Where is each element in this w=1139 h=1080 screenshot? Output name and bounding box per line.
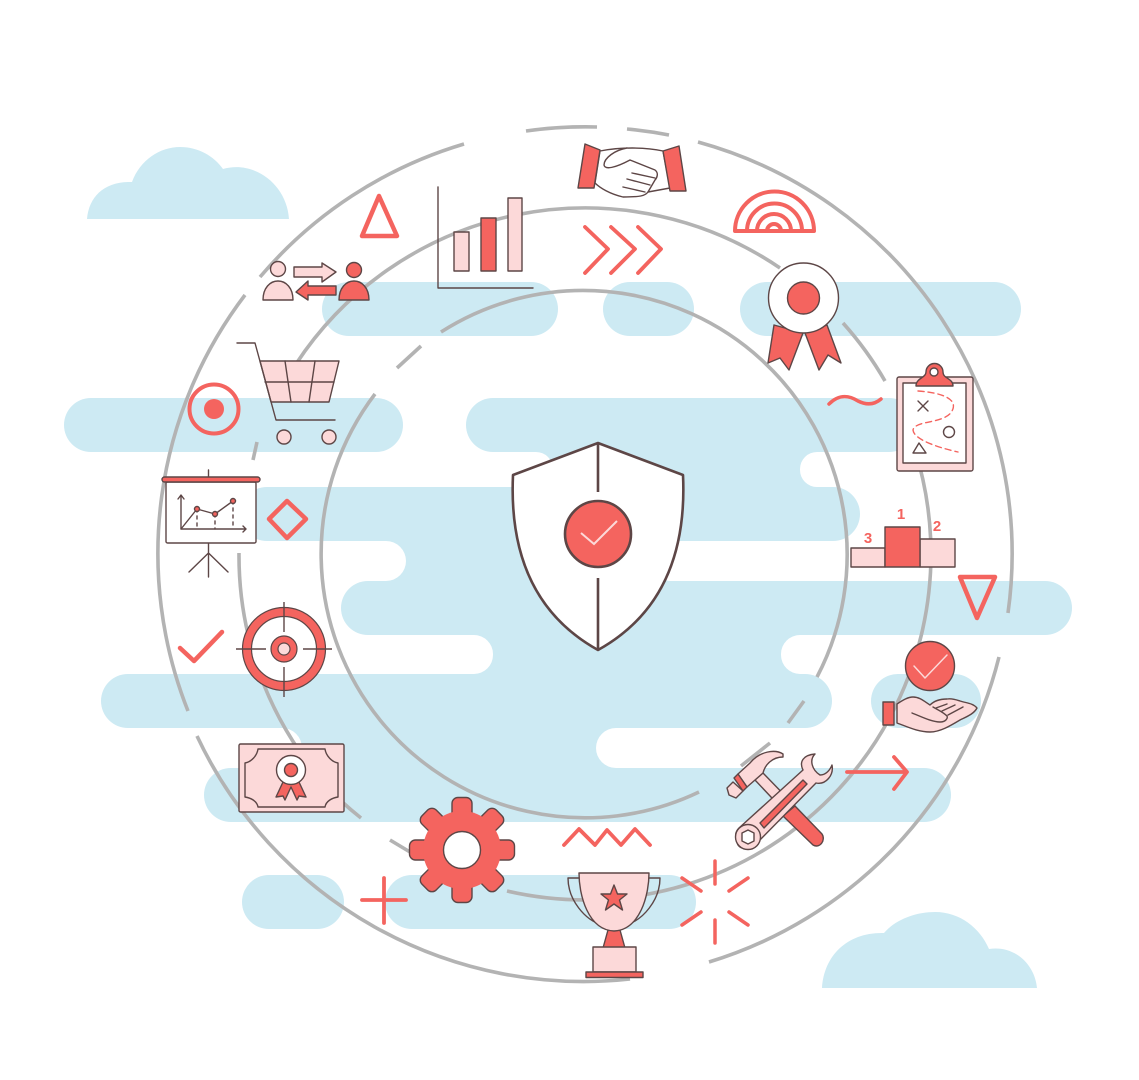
squiggle accent [829,396,881,404]
icon: bar chart [438,187,533,288]
icon: rainbow arcs [735,192,814,231]
icon: winners podium: 1 [897,506,905,523]
icon: award ribbon [768,263,841,370]
down triangle accent [960,577,995,618]
burst accent [682,861,748,943]
icon: hand holding check [883,642,977,732]
icon: presentation board [162,470,260,577]
diamond accent [269,501,306,538]
icon: handshake [578,144,686,197]
icon: winners podium: 2 [933,518,941,535]
plus accent [362,878,406,923]
icon: winners podium [851,506,955,567]
icon: shopping cart [237,343,339,444]
icon: trophy [568,873,660,978]
bullseye accent [190,384,238,434]
central shield icon [513,443,683,650]
icon: strategy clipboard [897,364,973,471]
icon: certificate [239,744,344,812]
icon: people exchanging [263,262,369,300]
background clouds and bands [0,147,1139,988]
chevrons accent [585,227,661,273]
icon: target crosshair [236,602,332,697]
zigzag accent [564,829,650,845]
icon: winners podium: 3 [864,530,872,547]
icon: gear [410,798,514,902]
triangle accent [362,196,397,236]
arrow accent [847,757,907,789]
concentric dashed rings [158,127,1012,982]
check mark accent [180,632,222,661]
icon: hammer and wrench [727,751,832,850]
